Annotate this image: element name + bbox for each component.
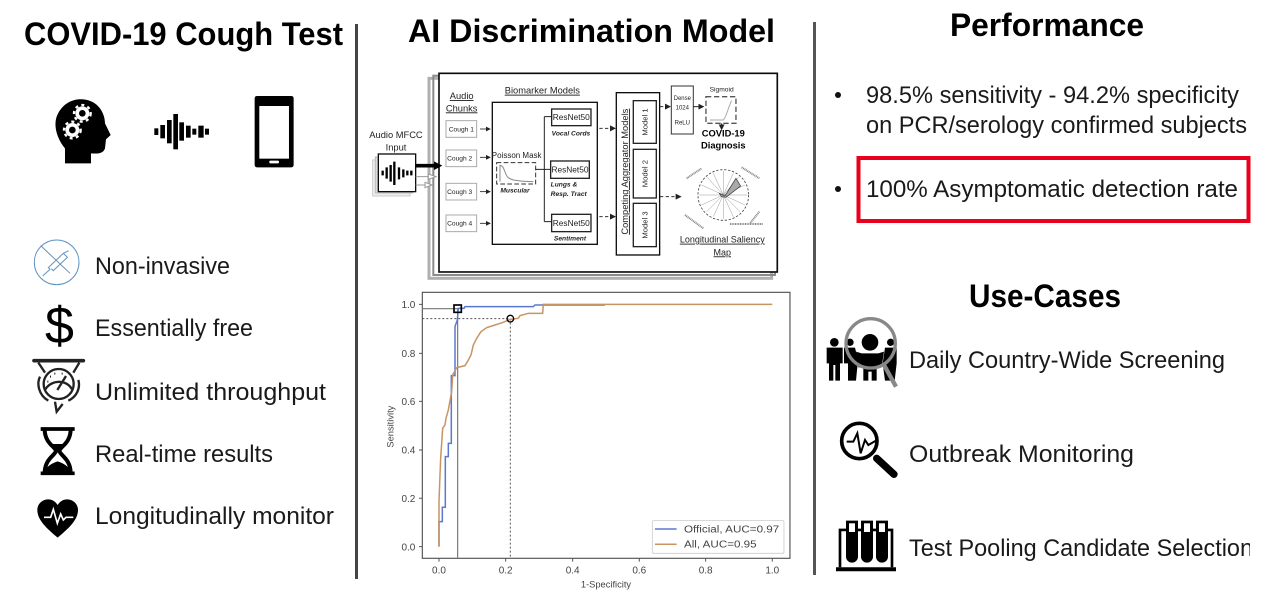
icon: sound waveform (154, 114, 209, 149)
text: Unlimited throughput: Unlimited throughput (95, 379, 326, 406)
icon: crossed-out syringe (34, 240, 79, 285)
panel: model architecture diagram (369, 73, 777, 278)
icon: magnifier with pulse (842, 423, 894, 474)
text: Non-invasive: Non-invasive (95, 253, 230, 280)
chart: ROC curve: 1-Specificity (581, 579, 631, 589)
panel: model architecture diagram: Resp. Tract (551, 191, 588, 198)
panel: model architecture diagram: Model 1 (640, 108, 649, 136)
panel: model architecture diagram: ResNet50 (553, 218, 590, 228)
panel: model architecture diagram: Lungs & (551, 182, 577, 189)
text: Outbreak Monitoring: Outbreak Monitoring (909, 441, 1134, 468)
icon: people under magnifier (827, 319, 897, 387)
chart: ROC curve: 0.2 (401, 494, 416, 505)
chart: ROC curve: All, AUC=0.95 (684, 540, 757, 551)
chart: ROC curve: 0.4 (401, 446, 416, 457)
icon: dollar sign: $ (45, 297, 74, 355)
chart: ROC curve: 0.0 (401, 542, 416, 553)
icon: head with gears (55, 99, 111, 163)
text: Essentially free: Essentially free (95, 315, 253, 342)
panel: model architecture diagram: Dense (674, 96, 692, 102)
panel: model architecture diagram: Muscular (500, 188, 530, 195)
text: sensitivity and specificity bullet: 98.5% sensitivity - 94.2% specificity (866, 82, 1239, 109)
title: COVID-19 Cough Test: COVID-19 Cough Test (24, 16, 343, 52)
text: Real-time results: Real-time results (95, 441, 273, 468)
panel: model architecture diagram: Audio MFCC (369, 130, 423, 140)
chart: ROC curve: 0.6 (401, 397, 416, 408)
panel: model architecture diagram: Sentiment (554, 236, 587, 243)
text: Longitudinally monitor: Longitudinally monitor (95, 503, 334, 530)
icon: test tubes in rack (836, 521, 896, 571)
title: Use-Cases: Use-Cases (969, 278, 1121, 314)
panel: model architecture diagram: ReLU (675, 120, 690, 126)
panel: model architecture diagram: ResNet50 (553, 112, 590, 122)
chart: ROC curve: 1.0 (401, 300, 416, 311)
panel: model architecture diagram: ResNet50 (551, 165, 589, 175)
panel: model architecture diagram: Audio (450, 91, 474, 101)
panel: model architecture diagram: Poisson Mask (492, 151, 542, 160)
chart: ROC curve: Official, AUC=0.97 (684, 524, 780, 535)
panel: model architecture diagram: COVID-19 (702, 128, 745, 138)
chart: ROC curve: 0.2 (499, 566, 513, 577)
icon: speedometer throughput (34, 361, 83, 412)
chart: ROC curve (385, 292, 790, 589)
chart: ROC curve: 0.0 (432, 566, 446, 577)
panel: model architecture diagram: Cough 3 (447, 189, 473, 196)
callout: asymptomatic detection rate: 100% Asymptomatic detection rate (866, 176, 1238, 203)
panel: model architecture diagram: Longitudinal Saliency (680, 235, 765, 245)
text: Daily Country-Wide Screening: Daily Country-Wide Screening (909, 347, 1225, 374)
panel: model architecture diagram: Model 3 (640, 211, 649, 239)
panel: model architecture diagram: Cough 1 (449, 126, 474, 133)
panel: model architecture diagram: Chunks (446, 103, 478, 113)
panel: model architecture diagram: Diagnosis (701, 141, 746, 151)
panel: model architecture diagram: Biomarker Models (505, 86, 580, 96)
panel: model architecture diagram: Sigmoid (710, 87, 734, 94)
text: sensitivity and specificity bullet: on PCR/serology confirmed subjects (866, 112, 1247, 139)
panel: model architecture diagram: Competing Aggregator Models (620, 108, 630, 235)
chart: ROC curve: 0.8 (699, 566, 713, 577)
title: Performance: Performance (950, 7, 1144, 43)
chart: ROC curve: 0.6 (632, 566, 647, 577)
chart: ROC curve: 0.8 (401, 349, 416, 360)
chart: ROC curve: Sensitivity (385, 405, 395, 448)
chart: ROC curve: 1.0 (765, 566, 780, 577)
panel: model architecture diagram: 1024 (676, 105, 690, 111)
panel: model architecture diagram: Cough 4 (447, 220, 473, 227)
panel: model architecture diagram: Cough 2 (447, 156, 473, 163)
title: AI Discrimination Model: AI Discrimination Model (408, 13, 775, 49)
panel: model architecture diagram: Input (386, 142, 407, 152)
panel: model architecture diagram: Vocal Cords (552, 130, 591, 137)
icon: heart with pulse (37, 499, 78, 538)
chart: ROC curve: 0.4 (566, 566, 580, 577)
callout: asymptomatic detection rate (835, 158, 1248, 221)
panel: model architecture diagram: Map (714, 247, 731, 257)
text: sensitivity and specificity bullet (835, 82, 1247, 139)
panel: model architecture diagram: Model 2 (640, 160, 649, 187)
icon: hourglass (41, 429, 75, 473)
icon: smartphone (255, 96, 294, 167)
text: Test Pooling Candidate Selection: Test Pooling Candidate Selection (909, 535, 1253, 562)
